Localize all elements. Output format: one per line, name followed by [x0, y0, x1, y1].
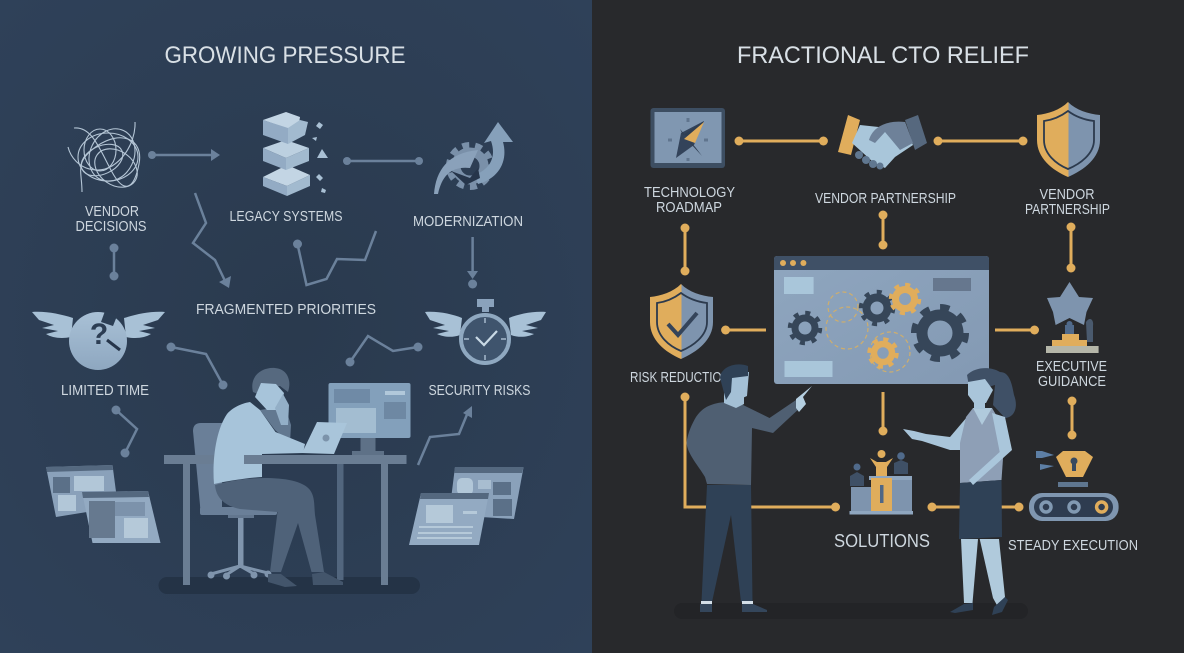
label: technology roadmap: TECHNOLOGY	[644, 185, 735, 201]
label: vendor decisions: DECISIONS	[76, 219, 146, 235]
desk front edge	[244, 455, 406, 464]
icon: scattered windows left	[46, 465, 160, 543]
label: modernization: MODERNIZATION	[413, 214, 523, 230]
arrow: modernization to security risks	[467, 237, 478, 288]
figure: overwhelmed worker at desk	[158, 368, 420, 594]
label: technology roadmap	[644, 185, 735, 216]
label: security risks: SECURITY RISKS	[428, 383, 530, 399]
connector: dashboard to star	[995, 326, 1039, 334]
monitor	[328, 383, 410, 455]
label: limited time: LIMITED TIME	[61, 383, 149, 399]
shoes	[268, 572, 343, 587]
label: executive guidance: GUIDANCE	[1038, 374, 1106, 390]
connector: roadmap to risk shield	[680, 224, 690, 276]
head	[255, 383, 284, 410]
connector: limited time to worker	[166, 342, 228, 390]
label: technology roadmap: ROADMAP	[656, 200, 722, 216]
label: risk reduction: RISK REDUCTION	[630, 370, 730, 386]
connector: shield to star	[1066, 222, 1076, 272]
label: solutions: SOLUTIONS	[834, 531, 930, 551]
arrow: vendor to legacy	[148, 149, 220, 161]
pointing arm	[903, 417, 967, 450]
legs	[215, 478, 324, 572]
connector: dashboard to solutions	[878, 392, 888, 436]
panel: fractional cto relief	[592, 0, 1184, 653]
icon: scattered windows right	[409, 467, 524, 545]
connector: limited time to windows	[112, 406, 137, 458]
dashed gear orbits	[826, 292, 910, 372]
forearm and chest shadow	[260, 400, 291, 443]
label: vendor partnership right	[1025, 187, 1110, 218]
title: growing pressure: GROWING PRESSURE	[164, 42, 406, 69]
face	[968, 379, 993, 403]
connector: risk reduction to solutions	[680, 392, 840, 512]
desk	[164, 455, 406, 585]
label: executive guidance	[1036, 359, 1107, 390]
label: vendor partnership right: PARTNERSHIP	[1025, 202, 1110, 218]
skirt	[959, 480, 1002, 539]
connector: roadmap to handshake	[734, 136, 828, 146]
icon: winged broken clock: ?	[90, 318, 108, 351]
icon: tangled vendor decisions	[68, 121, 145, 195]
label: vendor decisions: VENDOR	[85, 204, 139, 220]
panel: strategy dashboard window	[774, 256, 989, 384]
laptop	[302, 422, 347, 454]
connector: worker to security risks	[346, 336, 422, 366]
icon: winged stopwatch	[425, 299, 546, 363]
floor shadow	[674, 603, 1028, 619]
connector: risk shield to dashboard	[721, 326, 766, 334]
label: vendor partnership center: VENDOR PARTNERSHIP	[815, 191, 956, 207]
torso and arm	[214, 402, 305, 484]
torso	[960, 408, 1005, 483]
figure: man pointing at dashboard	[686, 364, 812, 612]
resting arm	[969, 413, 1012, 485]
icon: solutions podium	[850, 450, 913, 514]
label: steady execution: STEADY EXECUTION	[1008, 538, 1138, 554]
icon: executive star and podium	[1046, 282, 1099, 353]
label: fragmented priorities: FRAGMENTED PRIORITIES	[196, 302, 376, 318]
title: fractional cto relief: FRACTIONAL CTO RELIEF	[737, 42, 1029, 69]
label: vendor decisions	[76, 204, 146, 235]
hand on head	[275, 394, 289, 425]
label: legacy systems: LEGACY SYSTEMS	[230, 209, 342, 225]
icon: technology roadmap compass	[650, 108, 725, 168]
legs	[961, 539, 978, 603]
office chair	[193, 423, 277, 580]
icon: modernization gear and arrow	[434, 122, 513, 194]
panel: growing pressure	[0, 0, 592, 653]
floor shadow	[158, 577, 420, 594]
connector: partnership to dashboard	[878, 210, 888, 250]
hair	[252, 368, 289, 395]
arrow: windows to security risks	[418, 406, 472, 465]
label: executive guidance: EXECUTIVE	[1036, 359, 1107, 375]
label: vendor partnership right: VENDOR	[1040, 187, 1094, 203]
connector: zigzag from legacy	[293, 231, 376, 285]
gears	[790, 285, 966, 366]
icon: crumbling legacy systems	[263, 112, 328, 196]
icon: steady execution conveyor	[1029, 451, 1119, 521]
connector: guidance to execution	[1068, 396, 1076, 440]
connector: handshake to shield	[934, 136, 1028, 146]
arrow: zigzag to fragmented priorities	[193, 193, 231, 288]
connector: solutions to execution	[928, 502, 1024, 512]
figure: woman pointing at solutions	[903, 368, 1016, 615]
icon: winged broken clock	[32, 311, 165, 370]
icon: vendor partnership handshake	[838, 115, 927, 170]
icon: half gold shield	[1037, 102, 1100, 177]
line: legacy to modernization	[343, 157, 423, 165]
icon: risk reduction shield	[650, 284, 713, 359]
connector: vendor to limited time	[110, 244, 118, 280]
hair	[967, 368, 1016, 418]
